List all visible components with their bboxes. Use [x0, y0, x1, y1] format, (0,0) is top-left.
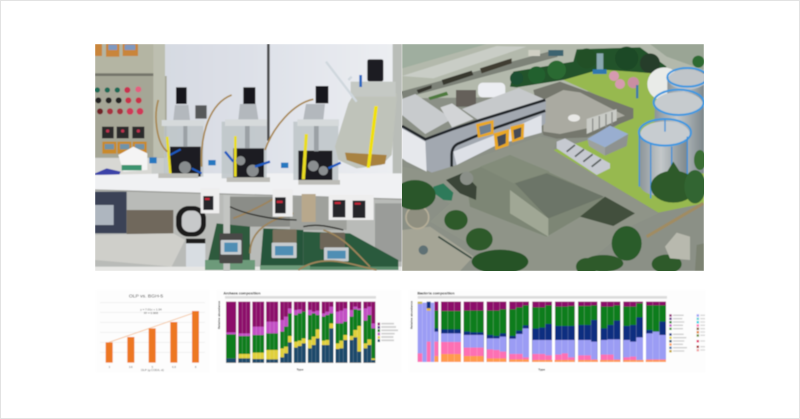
chart title: Bacteria composition: [417, 292, 455, 296]
facet strips: [225, 296, 376, 299]
control cabinet: [95, 44, 167, 158]
chart: archaea composition stacked bars: [217, 290, 402, 373]
chart: bacteria composition stacked bars: [409, 290, 705, 373]
chart title: Archaea composition: [223, 292, 261, 296]
chart panel: [409, 290, 705, 373]
grass lawn: [553, 69, 704, 213]
image: aerial rendering of treatment plant: [394, 44, 707, 275]
axis labels: 8: [195, 365, 197, 369]
foreground conifer cluster: [651, 150, 706, 203]
yellow layer: [226, 323, 375, 363]
first facet navy and yellow caps: [427, 302, 431, 308]
bar separators: [237, 300, 362, 363]
digester tanks: [639, 68, 707, 198]
x-axis title: Type: [297, 368, 304, 372]
x-axis title: Type: [538, 368, 545, 372]
chart panel: [96, 290, 209, 373]
paved yard with ring road: [533, 82, 633, 139]
parking and rail cars: [402, 46, 563, 93]
facet strips: [418, 296, 667, 299]
green layer: [226, 309, 375, 363]
chart panel: [217, 290, 402, 373]
lower shelf: [95, 188, 402, 271]
axis labels: 6.8: [172, 365, 176, 369]
chart title: OLP vs. BGH-5: [129, 294, 163, 300]
clarifier and lower-left facility: [402, 206, 473, 271]
green translucent building: [446, 155, 635, 237]
navy layer: [226, 328, 375, 363]
white dome: [646, 66, 675, 100]
large storage tank: [326, 59, 397, 168]
axis labels: 3: [109, 365, 111, 369]
purple layer: [226, 302, 375, 363]
orange layer: [434, 354, 666, 362]
periwinkle layer: [418, 303, 666, 362]
legend: [378, 323, 398, 342]
purple layer: [434, 302, 666, 362]
photo: laboratory bioreactors: [95, 44, 402, 271]
x-axis title: OLP (g COD/L·d): [141, 368, 164, 372]
y-axis title: Relative abundance: [217, 301, 221, 329]
main building: [402, 83, 546, 173]
utility units on lawn: [557, 109, 628, 175]
road edge and small roof: [647, 203, 704, 271]
legend column one: [669, 314, 687, 352]
cherry trees and gas flare: [593, 53, 639, 98]
reactor 1: [149, 87, 207, 178]
regression equation: y = 7.01x + 1.04: [140, 307, 162, 311]
navy layer: [434, 317, 666, 362]
legend column two: [697, 314, 705, 351]
trend line: [109, 312, 195, 342]
pink layer: [418, 342, 666, 362]
bench supplies and gloves: [95, 146, 152, 176]
reactor 2: [201, 87, 270, 182]
truck: [433, 183, 453, 201]
chart: OLP vs BGH-5 bar chart: [96, 290, 209, 373]
y-axis title: Relative abundance: [410, 301, 414, 329]
orange bars: [106, 311, 199, 363]
ground in front of building: [402, 137, 658, 271]
reactor 3: [265, 86, 341, 185]
axis labels: 5: [152, 365, 154, 369]
green layer: [434, 303, 666, 362]
bar separators: [440, 300, 645, 363]
dosing pump controllers: [201, 188, 374, 222]
bench top: [95, 173, 402, 199]
tree line: [428, 47, 704, 100]
axis labels: 3.8: [129, 365, 133, 369]
orchid layer: [226, 307, 375, 363]
landscaping trees: [394, 180, 682, 275]
regression equation: R² = 0.968: [144, 311, 158, 315]
